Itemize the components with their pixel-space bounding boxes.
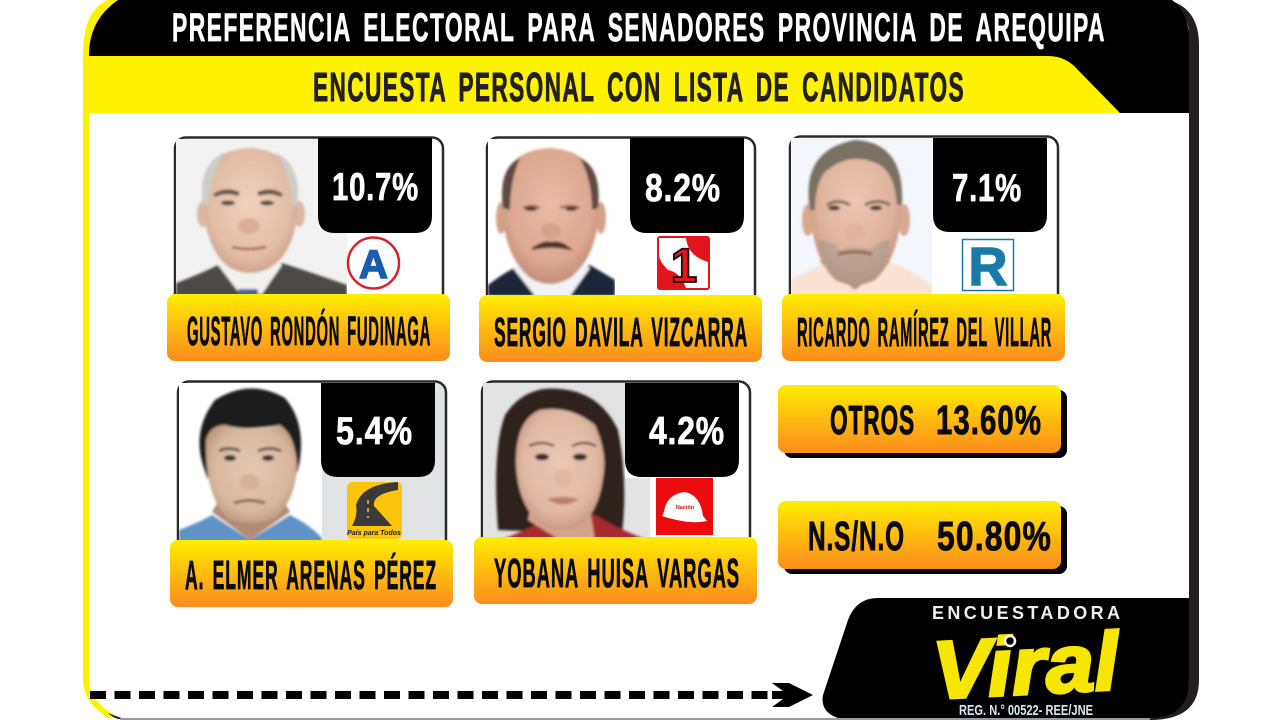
- photo: Yobana Huisa: [483, 383, 653, 540]
- footer brand panel: [823, 598, 1189, 719]
- name bar: [170, 540, 453, 607]
- dashed arrow: [90, 683, 813, 707]
- header band with title: [89, 0, 1189, 113]
- candidate card: Gustavo Rondón Fudinaga: [167, 138, 450, 361]
- percentage: 4.2%: [649, 410, 725, 453]
- percentage box: [321, 383, 435, 477]
- text: GUSTAVO RONDÓN FUDINAGA: [187, 308, 431, 354]
- photo: Elmer Arenas: [179, 383, 322, 542]
- summary bar: Otros: [778, 385, 1067, 458]
- percentage box: [318, 138, 432, 233]
- photo: Ricardo Ramírez: [791, 138, 932, 296]
- candidate card: Sergio Davila Vizcarra: [479, 138, 762, 362]
- party logo: A: [348, 238, 399, 288]
- value: 13.60%: [936, 397, 1042, 443]
- name bar: [782, 294, 1065, 361]
- party logo: 1: 1: [671, 240, 697, 293]
- name bar: [474, 537, 757, 604]
- party logo: A: A: [359, 243, 388, 287]
- registration: REG. N.° 00522- REE/JNE: [959, 702, 1093, 719]
- percentage box: [625, 383, 739, 477]
- brand logo: Viral: [930, 616, 1123, 717]
- photo: Sergio Davila: [488, 139, 615, 296]
- candidate card: Ricardo Ramírez del Villar: [782, 136, 1065, 361]
- summary bar: N.S/N.O: [778, 501, 1067, 574]
- candidate card: A. Elmer Arenas Pérez: [170, 382, 453, 607]
- text: A. ELMER ARENAS PÉREZ: [185, 552, 437, 598]
- percentage: 7.1%: [952, 167, 1022, 210]
- candidate card: Yobana Huisa Vargas: [474, 382, 757, 604]
- value: 50.80%: [937, 513, 1052, 559]
- photo: Gustavo Rondón: [176, 139, 347, 296]
- label: OTROS: [830, 397, 915, 443]
- party logo: helmet: Nación: [676, 505, 695, 511]
- percentage: 8.2%: [645, 167, 721, 210]
- percentage: 5.4%: [336, 410, 413, 453]
- party logo: 1: [657, 236, 710, 293]
- label: N.S/N.O: [808, 513, 905, 559]
- name bar: [167, 294, 450, 361]
- brand heading: ENCUESTADORA: [932, 603, 1120, 623]
- text: YOBANA HUISA VARGAS: [494, 550, 740, 596]
- percentage: 10.7%: [332, 166, 419, 209]
- party logo: País para Todos: País para Todos: [347, 530, 401, 537]
- party logo: R: R: [968, 237, 1008, 297]
- name bar: [479, 295, 762, 362]
- party logo: helmet: [656, 478, 713, 535]
- percentage box: [630, 138, 744, 233]
- subtitle band: [89, 56, 1120, 113]
- party logo: País para Todos: [347, 482, 402, 539]
- text: SERGIO DAVILA VIZCARRA: [494, 309, 748, 355]
- percentage box: [933, 138, 1047, 232]
